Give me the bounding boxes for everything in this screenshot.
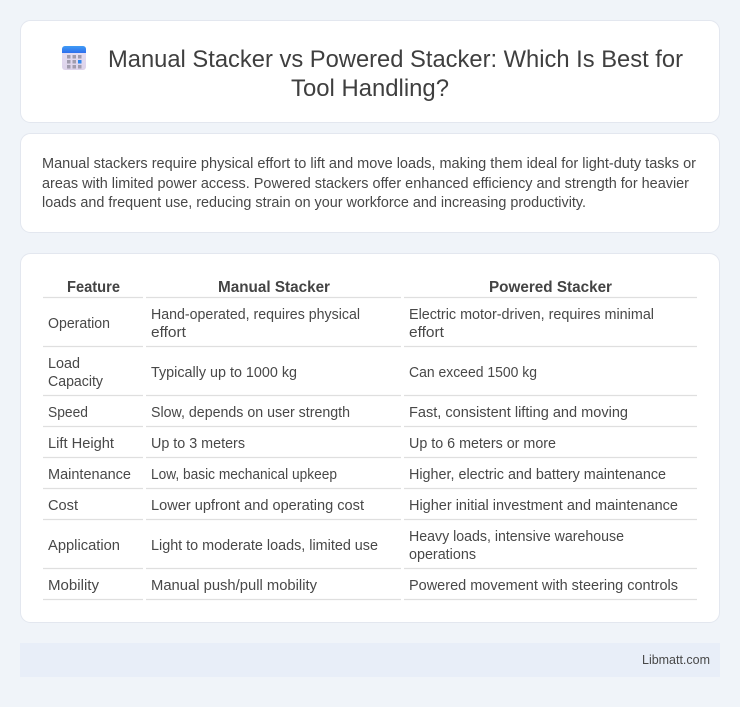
row: Maintenance: Low, basic mechanical upkeep [151, 467, 337, 483]
title: Tool Handling? [291, 75, 449, 102]
row: Mobility [48, 578, 678, 594]
footer text: Libmatt.com [642, 653, 710, 667]
row: Lift Height: Lift Height [48, 436, 114, 452]
row: Load Capacity: Typically up to 1000 kg [151, 365, 297, 381]
row: Cost: Lower upfront and operating cost [151, 498, 364, 514]
panel: title card [20, 20, 720, 122]
row: Mobility: Mobility [48, 578, 100, 594]
row: Mobility: Manual push/pull mobility [151, 578, 318, 594]
icon: calendar [62, 46, 86, 70]
row: Operation: Hand-operated, requires physical [151, 307, 360, 323]
row: Lift Height: Up to 3 meters [151, 436, 245, 452]
row: Cost: Higher initial investment and maintenance [409, 498, 678, 514]
row: Speed: Fast, consistent lifting and moving [409, 405, 628, 421]
row: Lift Height: Up to 6 meters or more [409, 436, 556, 452]
row: Application: Application [48, 538, 120, 554]
row: Lift Height [48, 436, 556, 452]
table header: Manual Stacker [218, 279, 330, 296]
row: Operation: Operation [48, 316, 110, 332]
row: Operation: effort [409, 325, 444, 341]
row: Load Capacity: Load [48, 356, 80, 372]
row: Application [48, 529, 624, 563]
intro text: areas with limited power access. Powered stackers offer enhanced efficiency and strength for heavier [42, 176, 689, 192]
intro text: loads and frequent use, reducing strain on your workforce and increasing productivity. [42, 195, 586, 211]
row: Operation [48, 307, 654, 341]
table header [67, 279, 612, 296]
row: Maintenance: Maintenance [48, 467, 131, 483]
row: Application: Light to moderate loads, limited use [151, 538, 378, 554]
row: Speed [48, 405, 628, 421]
row: Speed: Speed [48, 405, 88, 421]
row: Cost [48, 498, 678, 514]
row: Load Capacity: Can exceed 1500 kg [409, 365, 537, 381]
panel: comparison table [20, 254, 720, 622]
row: Load Capacity: Capacity [48, 374, 104, 390]
title: Manual Stacker vs Powered Stacker: Which Is Best for [108, 46, 683, 73]
row: Application: Heavy loads, intensive warehouse [409, 529, 624, 545]
row: Maintenance: Higher, electric and battery maintenance [409, 467, 666, 483]
row: Operation: Electric motor-driven, requires minimal [409, 307, 654, 323]
table header: Feature [67, 279, 120, 296]
intro text [42, 156, 696, 211]
row: Operation: effort [151, 325, 186, 341]
footer [20, 643, 720, 677]
table header: Powered Stacker [489, 279, 612, 296]
row: Maintenance [48, 467, 666, 483]
row: Application: operations [409, 547, 476, 563]
title [108, 46, 683, 102]
intro text: Manual stackers require physical effort to lift and move loads, making them ideal for light-duty tasks or [42, 156, 696, 172]
row: Mobility: Powered movement with steering controls [409, 578, 678, 594]
row: Cost: Cost [48, 498, 78, 514]
row: Load Capacity [48, 356, 537, 390]
row: Speed: Slow, depends on user strength [151, 405, 350, 421]
panel: introduction [20, 134, 720, 232]
